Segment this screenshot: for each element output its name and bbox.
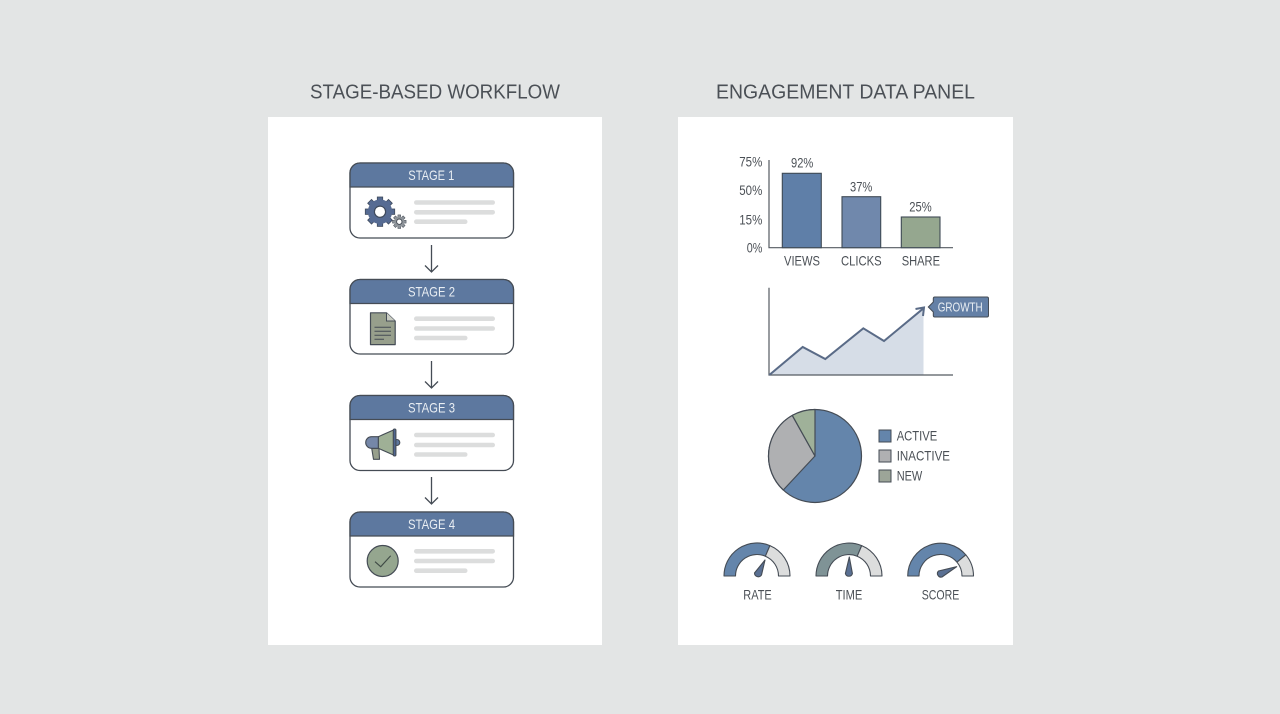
icon: check circle bbox=[367, 546, 398, 576]
heading: stage-based workflow: STAGE-BASED WORKFLOW bbox=[310, 82, 560, 104]
text placeholder lines bbox=[414, 433, 495, 457]
legend: ACTIVE bbox=[897, 428, 937, 444]
bar chart: VIEWS bbox=[784, 253, 820, 269]
card: stage 2 bbox=[350, 280, 514, 354]
legend: INACTIVE bbox=[897, 448, 950, 464]
card: stage 4: STAGE 4 bbox=[408, 516, 455, 532]
card: stage 3: STAGE 3 bbox=[408, 399, 455, 415]
bar chart: CLICKS bbox=[841, 253, 882, 269]
gauge: rate: RATE bbox=[743, 586, 772, 602]
icon: gears bbox=[365, 197, 406, 228]
gauge: time: TIME bbox=[836, 586, 862, 602]
heading: engagement data panel: ENGAGEMENT DATA PANEL bbox=[716, 82, 975, 104]
text placeholder lines bbox=[414, 200, 495, 224]
bar chart: 25% bbox=[909, 199, 932, 215]
arrow: stage 2 to stage 3 bbox=[425, 361, 438, 388]
bar chart: 50% bbox=[739, 182, 762, 198]
bar chart: 15% bbox=[739, 211, 762, 227]
card: stage 1 bbox=[350, 163, 514, 238]
text placeholder lines bbox=[414, 316, 495, 340]
pie chart bbox=[768, 409, 862, 502]
panel: engagement data bbox=[678, 117, 1013, 645]
bar chart: 75% bbox=[739, 154, 762, 170]
legend bbox=[879, 428, 950, 484]
callout: growth label: GROWTH bbox=[938, 300, 983, 314]
legend: NEW bbox=[897, 468, 923, 484]
bar chart: SHARE bbox=[902, 253, 940, 269]
panel: stage-based workflow bbox=[268, 117, 602, 645]
arrow: stage 3 to stage 4 bbox=[425, 477, 438, 504]
bar chart bbox=[739, 154, 953, 269]
gauge: score bbox=[908, 543, 974, 602]
icon: megaphone bbox=[366, 429, 400, 459]
card: stage 2: STAGE 2 bbox=[408, 283, 455, 299]
bar chart: 92% bbox=[791, 155, 813, 171]
arrow: stage 1 to stage 2 bbox=[425, 245, 438, 272]
gauge: rate bbox=[724, 543, 790, 602]
callout: growth label bbox=[928, 297, 988, 317]
card: stage 4 bbox=[350, 512, 514, 587]
bar chart: 37% bbox=[850, 179, 872, 195]
gauge: score: SCORE bbox=[922, 586, 959, 602]
line chart: growth bbox=[769, 288, 988, 375]
card: stage 1: STAGE 1 bbox=[408, 167, 454, 183]
text placeholder lines bbox=[414, 549, 495, 573]
bar chart: 0% bbox=[747, 240, 762, 256]
gauge: time bbox=[816, 543, 882, 602]
card: stage 3 bbox=[350, 396, 514, 470]
icon: document bbox=[370, 313, 395, 345]
